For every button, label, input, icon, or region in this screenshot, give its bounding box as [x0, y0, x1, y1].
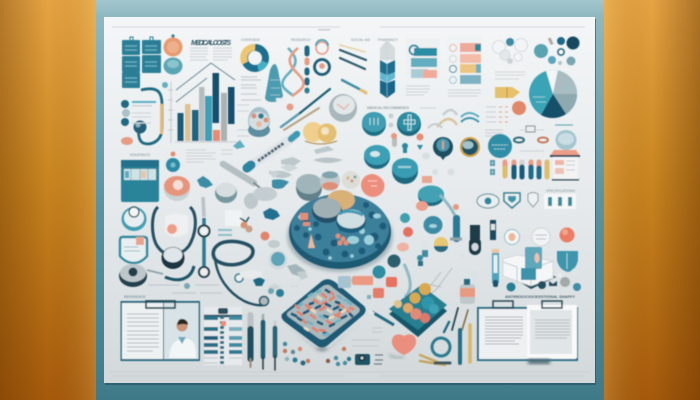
icon: dark capsule: [433, 137, 453, 160]
headings: top-right columns: [351, 38, 479, 42]
panel: top header rule: [112, 27, 585, 30]
icon: teal badge: [164, 58, 182, 74]
icon: grey dish: [329, 94, 357, 122]
text block: captions below stethoscope: [124, 283, 222, 299]
icon: white molecule cluster: [492, 38, 528, 79]
icon group: teal circles top-right: [534, 36, 580, 66]
group: loose pills beneath tray: [283, 342, 351, 366]
panel: clipboard with doctor: [120, 301, 200, 361]
icon: gold tablets: [303, 122, 337, 144]
chart panel: donut: [241, 38, 266, 100]
footer lines: [110, 372, 590, 376]
headings: top-right columns: SOCIAL AID: [351, 38, 371, 42]
icon group: small pins: [388, 114, 454, 183]
icon: teal figure: [265, 64, 294, 110]
icon: scissors and pens: [420, 308, 470, 365]
legend: chart key dots: [121, 82, 168, 145]
chart panel: donut: OVERVIEW: [241, 38, 260, 42]
icon: DNA helix and chains: [282, 38, 330, 96]
headings: top-right columns: MEDICAL ISSUES: [408, 38, 438, 42]
heading: middle band: [367, 106, 436, 110]
icon: syringe: [223, 164, 265, 192]
icon: eye tablet: [477, 194, 499, 208]
icon: gold ring: [460, 137, 480, 157]
icon: inhaler and microscope: [450, 204, 481, 255]
icon: camera and notes: [352, 328, 383, 365]
icon: strap: [369, 311, 394, 325]
group: small icons around coil: [218, 208, 351, 297]
icon: calendar card: [121, 153, 159, 202]
icon: tablet tray: [389, 283, 447, 337]
icon: teal pouch: [557, 251, 578, 272]
icon: heart: [390, 334, 416, 358]
figure: doctor portrait: [169, 319, 196, 358]
panel: colour row table: [447, 36, 482, 96]
icon: teal badge with dial: [122, 207, 146, 231]
title: MEDICAL COSTS: [191, 38, 231, 47]
small sketches: [427, 254, 479, 296]
icon: bottle: [460, 279, 475, 304]
icon group: small parts right: [506, 268, 581, 292]
icon: salmon tablet: [164, 176, 190, 201]
icon: red orb: [560, 228, 574, 242]
bar chart: medical costs: [168, 63, 249, 143]
icon: DNA helix and chains: RESEARCH: [291, 38, 311, 42]
table: pricing rows: [204, 307, 242, 365]
icon: pill bowl: [248, 107, 270, 137]
icon group: teal buttons: [362, 112, 444, 206]
icon: curved clips: [428, 110, 479, 128]
icon: stethoscope small dials: [198, 197, 210, 277]
icon group: small gears: [514, 126, 548, 151]
icon: small vial and text badges: [490, 220, 550, 246]
heading: lower right: ANTIRESOCIOCESSTIONAL SHAFFY: [505, 295, 575, 299]
group: mid right tablets: [352, 201, 448, 299]
icon: large stethoscope: [152, 207, 195, 280]
poster sheet: [104, 17, 596, 385]
icon: heart shields: [504, 192, 538, 208]
icon: blue stacked tower: [380, 40, 395, 98]
icon: vertical tube: [492, 249, 499, 287]
icon: teal note card: [120, 237, 147, 263]
icon: teal drop with red cap: [166, 152, 180, 172]
icon: pale blue disc: [555, 125, 576, 150]
icon: orange badge: [164, 34, 182, 56]
text block: centre-left notes: [186, 150, 233, 162]
icon: white medicine box: [503, 247, 556, 289]
icon: ointment tube: [247, 134, 297, 168]
icon group: coloured vials: [491, 161, 547, 177]
icon: stethoscope with legend: [134, 89, 163, 144]
heading and tiles: [544, 189, 576, 209]
pie chart: [529, 70, 577, 118]
center: big medicine plate: [287, 190, 393, 272]
icon: big curved line: [404, 195, 459, 297]
icon: pens: [281, 89, 330, 130]
group: small tablets beneath syringe: [197, 140, 343, 209]
icon: pens left of stack: [340, 45, 366, 93]
icon: gold tag: [495, 87, 520, 98]
icon: salmon tablet: [512, 101, 526, 115]
icon: coiled tube: [213, 241, 268, 306]
headings: top-right columns: EXPENDITURES: [451, 38, 479, 42]
heading and tiles: SPECIFICATIONS: [546, 189, 576, 193]
icon: calendar card: INSURANCE: [130, 153, 151, 157]
headings: top-right columns: PHARMACY: [378, 38, 399, 42]
panel: ribbon chart: [406, 38, 440, 95]
icon: stethoscope chest piece: [119, 264, 163, 287]
icon: pill dishes above plate: [296, 171, 383, 201]
icon: medicine tray: [281, 279, 366, 351]
icon: clinic house: [550, 150, 580, 180]
text block: captions below stethoscope: REFERENCE: [124, 295, 146, 299]
icon group: vertical pens: [250, 315, 275, 370]
text block: intro columns: [190, 48, 232, 60]
icon: teal info button: [488, 134, 512, 158]
icon group: teal folders: [122, 37, 161, 88]
text block: small table: [485, 107, 508, 136]
icon: open clipboard book: [477, 301, 578, 364]
heading: middle band: MEDICAL RECOMMENDS: [367, 106, 409, 110]
